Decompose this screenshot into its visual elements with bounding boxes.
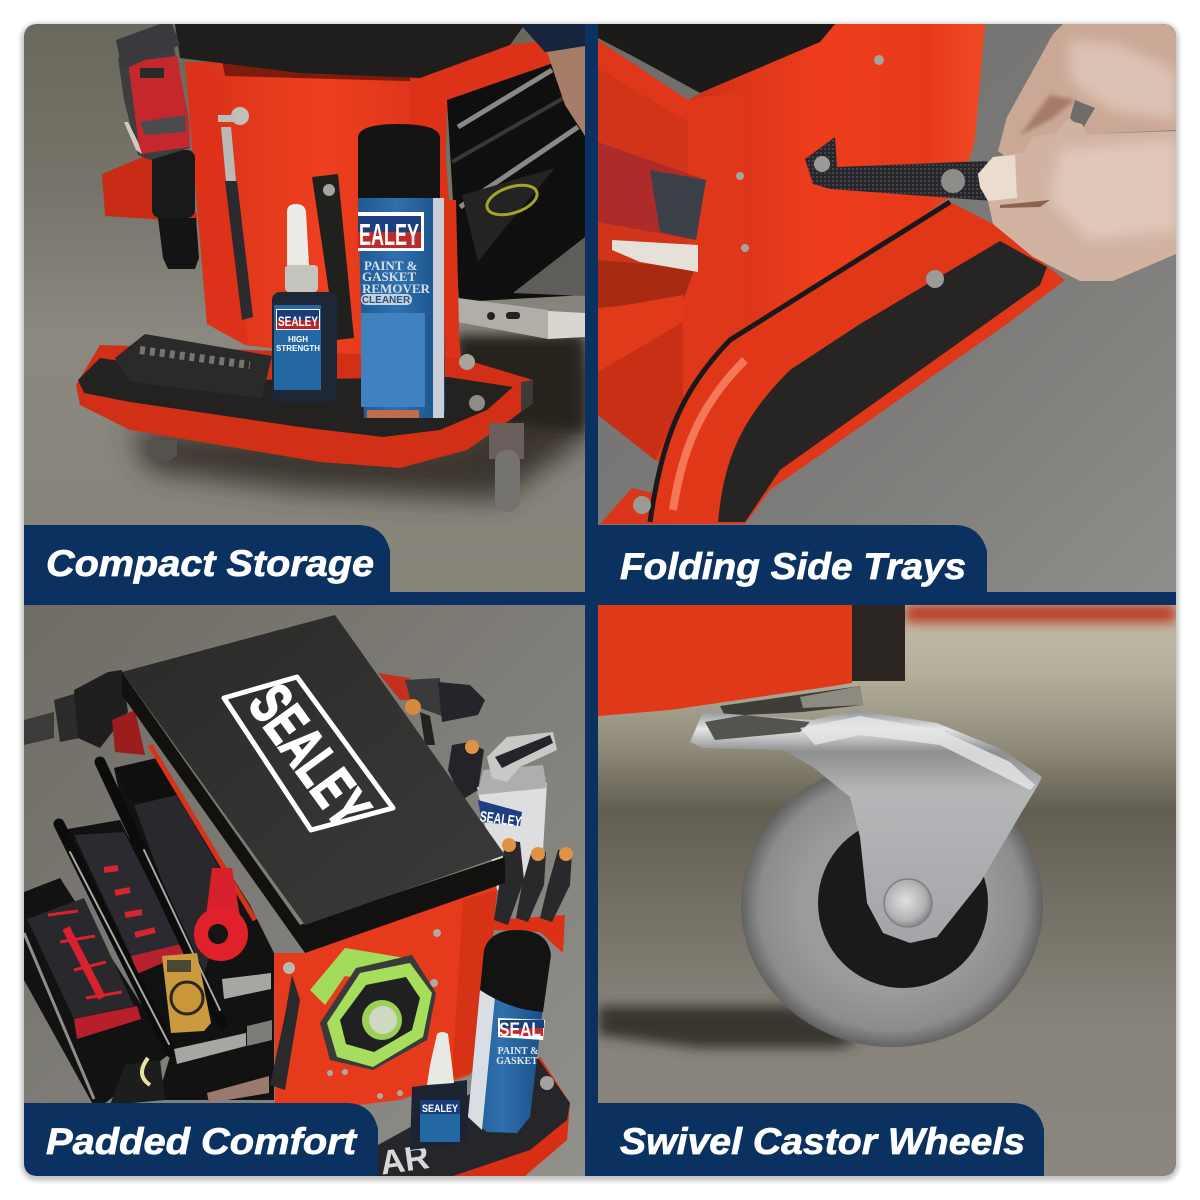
magnetic pick-up tool [218,107,253,320]
lower drawer surface [513,237,585,296]
tray corner block [521,380,533,412]
thread lock bottle [272,204,337,402]
black post [852,605,905,681]
seat top [122,615,505,925]
aerosol can: REMOVER [362,281,430,296]
lower hand [978,120,1176,281]
swivel bracket [690,710,1042,943]
frame foot [600,488,652,524]
top-right drill [378,673,485,745]
drawer rails [59,762,222,1052]
cart side column highlight [185,62,212,327]
recess shadow under drill [598,260,695,308]
cart front panel [185,62,462,372]
white spray can [477,732,557,890]
panel: padded comfort [24,605,585,1183]
axle bolt [884,879,932,927]
cart side panel [598,40,718,462]
frame bolts [633,270,944,514]
mounting plate [720,686,863,716]
panel: compact storage [24,24,585,592]
screwdrivers [494,838,573,925]
panel: folding side trays [598,24,1176,592]
aerosol can: SEAL [499,1020,541,1041]
curved frame tube [650,202,1065,524]
thread lock bottle: SEALEY [422,1103,459,1115]
thread lock bottle: STRENGTH [276,344,320,353]
label: folding side trays: Folding Side Trays [620,546,966,587]
upper red frame [410,42,551,158]
aerosol can: CLEANER [362,295,411,306]
background red shelf [905,605,1176,622]
drawer rails [458,70,578,207]
impact driver [24,670,145,755]
label: swivel castor wheels: Swivel Castor Wheels [620,1121,1025,1162]
tool holder [493,915,565,953]
cart front [688,24,985,328]
thread lock bottle [410,1032,467,1150]
work light [310,948,436,1070]
red post right of can [449,200,460,338]
seat logo outline [224,677,393,830]
shadow under seat [222,63,410,82]
floor [598,24,1176,592]
multimeter [162,953,211,1033]
label: folding side trays [598,525,987,592]
wheel [741,763,1043,1047]
floor [24,24,585,592]
middle drawer [62,820,222,1050]
open drawers [447,52,585,302]
thread lock bottle: SEALEY [278,313,318,329]
sleeve and hand [520,24,585,52]
red side wall [274,880,497,1115]
magnetic tool on wall [270,962,300,1090]
top drawer foam [134,795,237,985]
cart screws [736,55,884,252]
front castors [147,423,524,512]
floor shadow under cart [130,345,585,500]
strap [312,174,354,340]
label: compact storage: Compact Storage [46,543,374,584]
drill holder [102,154,197,222]
floor [24,605,585,1176]
wall rivets [327,929,441,1099]
tray outer red [76,345,533,468]
cart interior cavity [114,758,274,1100]
tube highlight [673,360,745,510]
drawer slides [174,973,272,1103]
label: compact storage [24,525,390,592]
webbing strap [805,137,993,201]
red edge beside seat [150,745,255,920]
drill [598,142,706,272]
label: swivel castor wheels [598,1103,1044,1176]
seat side band [122,672,505,953]
folded tray shelf [621,295,683,306]
seat logo text: SEALEY [236,672,383,840]
tray [378,1057,570,1176]
panel: swivel castor wheels [598,605,1176,1176]
top drawer back wall [114,758,177,805]
wheel shadow [598,1006,860,1048]
white spray can: SEALEY [479,808,523,831]
label: padded comfort: Padded Comfort [46,1121,358,1162]
aerosol can: GASKET [496,1056,538,1067]
tray black mat [78,358,513,437]
label: padded comfort [24,1103,378,1176]
drawer tray and yellow marking [462,168,555,262]
aerosol can [468,930,551,1133]
red handle [194,868,248,961]
aerosol can [358,124,445,418]
aerosol can: GASKET [362,269,417,284]
seat pad [122,615,505,953]
floor and wall [598,605,1176,1176]
black rail [718,241,1047,522]
upper hand [998,24,1176,160]
seat pad [598,24,835,93]
thread lock bottle: HIGH [288,335,308,344]
red wall post [452,890,497,1078]
bit set [115,334,272,398]
drawer slide [458,298,585,339]
seat pad [175,24,525,78]
side shading [598,68,688,290]
tray lettering: AR [378,1138,432,1183]
bottom drawer [24,878,172,1110]
dark screwdriver behind can [448,742,484,800]
tray bolts [459,354,475,370]
aerosol can: PAINT & [497,1046,539,1057]
red chassis [598,605,852,716]
aerosol can: PAINT & [364,258,417,273]
drill [116,24,199,269]
aerosol can: EALEY [359,217,419,252]
